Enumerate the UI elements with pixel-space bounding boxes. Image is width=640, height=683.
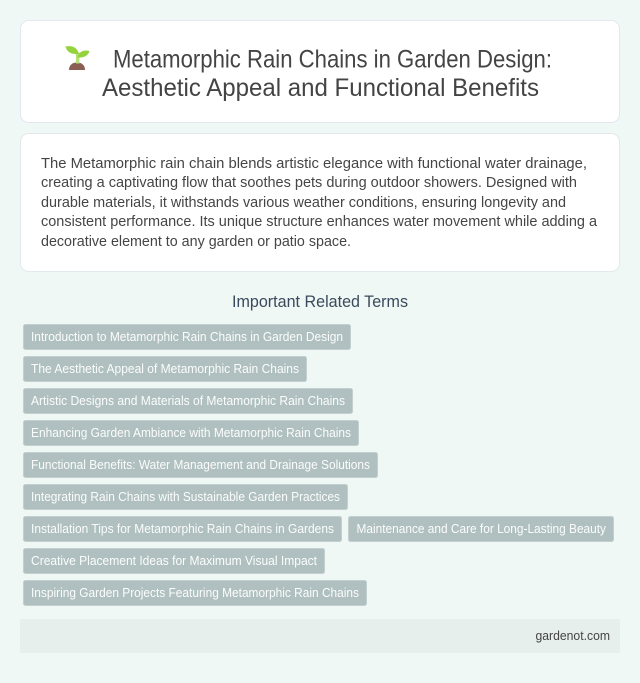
- icon: seedling: [66, 46, 90, 70]
- related terms heading: Important Related Terms: [232, 293, 408, 311]
- description text: [41, 155, 598, 250]
- tag: introduction: Introduction to Metamorphic Rain Chains in Garden Design: [31, 330, 343, 344]
- description text: The Metamorphic rain chain blends artistic elegance with functional water drainage,: [41, 155, 587, 172]
- tag: maintenance: [348, 516, 614, 542]
- description text: consistent performance. Its unique structure enhances water movement while adding a: [41, 213, 598, 230]
- tag: artistic designs: Artistic Designs and Materials of Metamorphic Rain Chains: [31, 394, 345, 408]
- title heading: Aesthetic Appeal and Functional Benefits: [102, 74, 539, 102]
- footer source text: gardenot.com: [536, 628, 610, 643]
- tag: artistic designs: [24, 388, 352, 414]
- tag: inspiring projects: [24, 580, 366, 606]
- tag: installation tips: [24, 516, 342, 542]
- tag: inspiring projects: Inspiring Garden Projects Featuring Metamorphic Rain Chains: [31, 586, 359, 600]
- related terms list: [24, 324, 614, 606]
- description text: durable materials, it withstands various weather conditions, ensuring longevity and: [41, 194, 566, 211]
- tag: installation tips: Installation Tips for Metamorphic Rain Chains in Gardens: [31, 522, 334, 536]
- tag: sustainable practices: Integrating Rain Chains with Sustainable Garden Practices: [31, 490, 340, 504]
- description text: creating a captivating flow that soothes pets during outdoor showers. Designed with: [41, 174, 577, 191]
- footer: [20, 619, 620, 653]
- tag: creative placement: Creative Placement Ideas for Maximum Visual Impact: [31, 554, 317, 568]
- title heading: Metamorphic Rain Chains in Garden Design:: [113, 46, 552, 74]
- description text: decorative element to any garden or patio space.: [41, 233, 351, 250]
- tag: maintenance: Maintenance and Care for Long-Lasting Beauty: [356, 522, 607, 536]
- tag: functional benefits: Functional Benefits: Water Management and Drainage Solutions: [31, 458, 370, 472]
- title panel: [20, 20, 620, 122]
- tag: sustainable practices: [24, 484, 348, 510]
- tag: aesthetic appeal: [24, 356, 306, 382]
- tag: aesthetic appeal: The Aesthetic Appeal of Metamorphic Rain Chains: [31, 362, 299, 376]
- description panel: [20, 134, 620, 272]
- tag: introduction: [24, 324, 350, 350]
- tag: creative placement: [24, 548, 324, 574]
- tag: garden ambiance: Enhancing Garden Ambiance with Metamorphic Rain Chains: [31, 426, 351, 440]
- tag: garden ambiance: [24, 420, 358, 446]
- title heading: [102, 46, 552, 102]
- tag: functional benefits: [24, 452, 378, 478]
